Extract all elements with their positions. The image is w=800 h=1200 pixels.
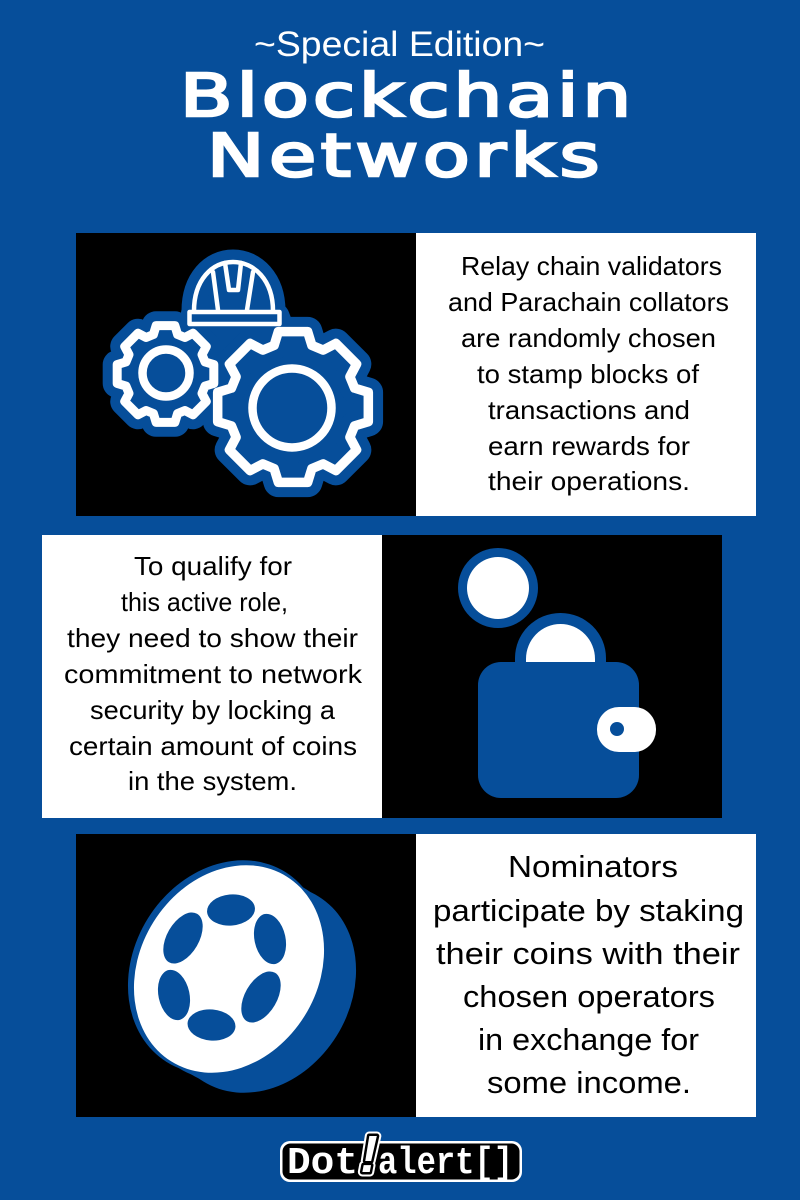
panel: nominators [76, 823, 756, 1129]
text: nominators: in exchange for [478, 1022, 699, 1057]
text: nominators: participate by staking [433, 893, 744, 928]
logo: Dot!alert[]: alert[] [378, 1142, 513, 1185]
text: nominators [433, 849, 744, 1100]
text: relay chain validators: are randomly chosen [461, 323, 716, 353]
subtitle: special edition: ~Special Edition~ [254, 25, 545, 64]
text: qualification: security by locking a [90, 695, 336, 725]
text: nominators: chosen operators [463, 979, 715, 1014]
logo: Dot!alert[]: ! [360, 1126, 378, 1184]
text: qualification: in the system. [128, 766, 297, 796]
heading: Networks: Networks [207, 122, 600, 191]
text: nominators: Nominators [508, 849, 678, 884]
text: relay chain validators: earn rewards for [488, 431, 690, 461]
icon: wallet and coins [458, 548, 656, 798]
icon: gears with hard hat [117, 262, 368, 482]
icon: polkadot coin [89, 823, 394, 1129]
text: nominators: their coins with their [436, 936, 740, 971]
text: relay chain validators [448, 251, 729, 496]
text: qualification [64, 551, 363, 796]
text: qualification: this active role, [121, 587, 288, 617]
text: relay chain validators: transactions and [488, 395, 690, 425]
text: nominators: some income. [487, 1065, 691, 1100]
panel: locking coins [42, 535, 722, 818]
logo: Dot!alert[]: ! [360, 1126, 378, 1184]
panel: validators and collators [76, 233, 756, 516]
logo: Dot!alert[]: ! [360, 1126, 378, 1184]
text: qualification: To qualify for [134, 551, 292, 581]
text: qualification: certain amount of coins [69, 731, 357, 761]
text: qualification: commitment to network [64, 659, 363, 689]
logo: Dot!alert[] [280, 1126, 522, 1185]
logo: Dot!alert[]: Dot [287, 1142, 358, 1185]
text: relay chain validators: to stamp blocks of [477, 359, 700, 389]
text: relay chain validators: and Parachain collators [448, 287, 729, 317]
text: relay chain validators: Relay chain validators [461, 251, 722, 281]
title block [180, 25, 631, 191]
heading: Blockchain: Blockchain [180, 62, 631, 131]
text: qualification: they need to show their [67, 623, 358, 653]
text: relay chain validators: their operations. [488, 466, 690, 496]
